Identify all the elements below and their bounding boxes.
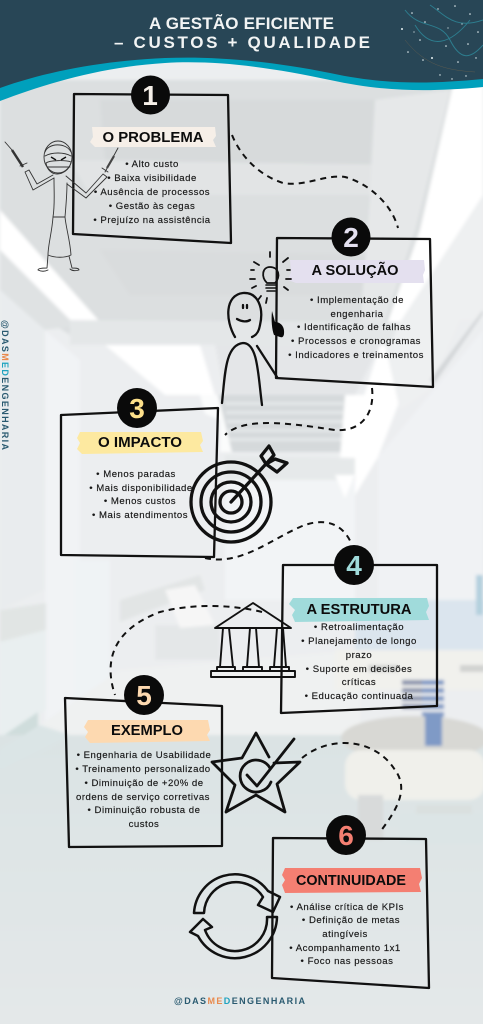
bullet list: • Treinamento personalizado	[75, 764, 211, 775]
title: – CUSTOS + QUALIDADE	[114, 33, 370, 52]
icon: cycle arrows	[190, 874, 280, 958]
header banner	[0, 0, 483, 101]
number badge 3: 3	[129, 393, 145, 424]
bullet list: • Diminuição de +20% de	[84, 778, 204, 789]
title: A GESTÃO EFICIENTE	[149, 13, 334, 33]
number badge 6	[326, 815, 366, 855]
bullet list: • Alto custo	[125, 159, 179, 170]
bullet list: • Diminuição robusta de	[88, 805, 200, 816]
bullet list: ordens de serviço corretivas	[76, 792, 210, 803]
bullet list: • Implementação de	[310, 295, 404, 306]
bullet list: • Retroalimentação	[314, 622, 404, 633]
heading: O PROBLEMA	[102, 130, 204, 146]
bullet list: • Prejuízo na assistência	[93, 215, 211, 226]
bullet list: • Planejamento de longo	[301, 636, 417, 647]
bullet list	[93, 159, 211, 226]
number badge 4	[334, 545, 374, 585]
bullet list: • Análise crítica de KPIs	[290, 902, 404, 913]
side handle: @DAS M E D ENGENHARIA	[0, 320, 10, 450]
number badge 2: 2	[343, 222, 359, 253]
bullet list: • Foco nas pessoas	[301, 956, 393, 967]
bullet list: • Engenharia de Usabilidade	[77, 750, 211, 761]
bullet list: prazo	[346, 650, 372, 661]
panel: Continuidade	[272, 815, 429, 988]
bullet list	[89, 469, 193, 521]
connector: 3 to 4	[205, 522, 352, 559]
panel: Exemplo	[65, 675, 222, 847]
bullet list	[289, 902, 404, 967]
icon: light bulb	[250, 252, 291, 303]
bullet list: • Menos custos	[104, 496, 176, 507]
connector: 4 to 5	[111, 606, 262, 695]
heading: EXEMPLO	[111, 723, 183, 739]
heading: CONTINUIDADE	[296, 873, 406, 889]
panel: A estrutura	[281, 545, 437, 713]
bullet list: • Mais atendimentos	[92, 510, 188, 521]
panel: O impacto	[61, 388, 218, 557]
number badge 5	[124, 675, 164, 715]
panel: A solução	[276, 218, 433, 387]
heading patch	[77, 432, 203, 454]
connector: 2 to 3	[225, 388, 372, 435]
heading patch	[84, 720, 210, 743]
bullet list	[288, 295, 424, 361]
bullet list: críticas	[342, 677, 376, 688]
icon: target with arrow	[191, 446, 287, 542]
bullet list: • Menos paradas	[96, 469, 176, 480]
bullet list: • Educação continuada	[305, 691, 414, 702]
bullet list: • Mais disponibilidade	[89, 483, 193, 494]
bullet list: • Identificação de falhas	[297, 322, 411, 333]
number badge 1	[131, 76, 170, 114]
bullet list: • Definição de metas	[302, 915, 400, 926]
bullet list: • Processos e cronogramas	[291, 336, 421, 347]
heading patch	[282, 868, 422, 893]
bullet list: • Suporte em decisões	[306, 664, 412, 675]
heading: A SOLUÇÃO	[312, 261, 398, 279]
heading: O IMPACTO	[98, 435, 182, 451]
bullet list: • Ausência de processos	[94, 187, 210, 198]
icon: person pointing with light bulb	[222, 252, 291, 405]
bullet list: engenharia	[330, 309, 384, 320]
bullet list: custos	[129, 819, 159, 830]
connector: 1 to 2	[232, 135, 398, 228]
panel: O problema	[73, 76, 231, 243]
heading: A ESTRUTURA	[306, 602, 412, 618]
icon: star with check	[212, 733, 300, 812]
bullet list: • Baixa visibilidade	[107, 173, 197, 184]
bullet list: • Gestão às cegas	[109, 201, 195, 212]
bullet list: • Acompanhamento 1x1	[289, 943, 401, 954]
number badge 5: 5	[136, 680, 152, 711]
heading patch	[288, 260, 425, 283]
number badge 4: 4	[346, 550, 362, 581]
bullet list: atingíveis	[322, 929, 368, 940]
number badge 6: 6	[338, 820, 354, 851]
icon: temple	[211, 603, 295, 677]
constellation decoration	[401, 5, 483, 80]
connector: 5 to 6	[302, 743, 401, 832]
title	[114, 13, 370, 52]
bullet list	[301, 622, 417, 702]
bullet list	[75, 750, 211, 830]
number badge 2	[332, 218, 370, 256]
icon: doctor with syringes	[5, 141, 118, 271]
bullet list: • Indicadores e treinamentos	[288, 350, 424, 361]
number badge 1: 1	[142, 80, 158, 111]
heading patch	[289, 598, 429, 622]
number badge 3	[117, 388, 157, 428]
footer handle: @DASMEDENGENHARIA	[174, 996, 306, 1006]
heading patch	[90, 127, 216, 147]
